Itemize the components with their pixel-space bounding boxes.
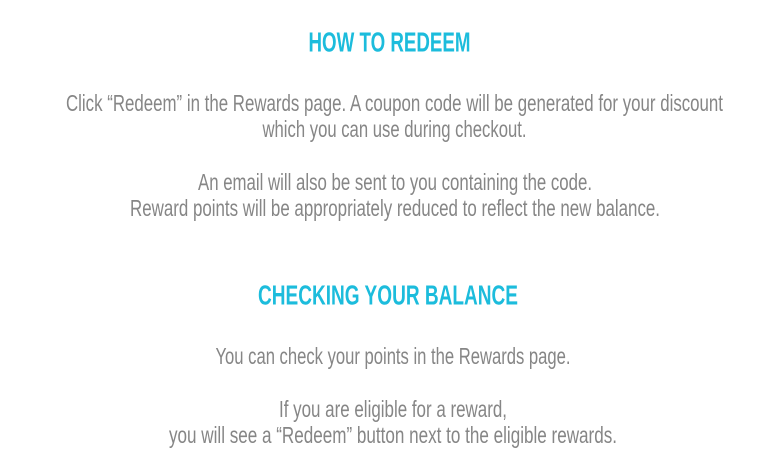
text block: email and balance note: An email will also be sent to you containing the code. [198,169,592,195]
text block: redeem instructions [66,90,723,142]
text block: email and balance note [130,169,660,221]
text block: eligibility note: you will see a “Redeem” button next to the eligible rewards. [169,422,617,448]
text block: eligibility note [169,396,617,448]
heading: how to redeem: HOW TO REDEEM [308,26,470,58]
heading: checking your balance: CHECKING YOUR BALANCE [258,280,518,310]
text block: eligibility note: If you are eligible for a reward, [279,396,507,422]
text block: redeem instructions: which you can use during checkout. [262,116,526,142]
text block: check points: You can check your points in the Rewards page. [216,343,570,369]
